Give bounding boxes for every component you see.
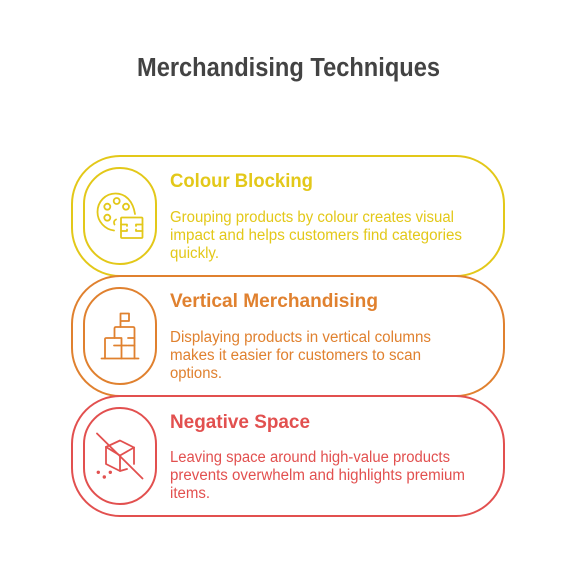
inner pill: colour blocking — [84, 168, 156, 264]
outer pill: negative space — [72, 396, 504, 516]
heading: vertical merchandising: Vertical Merchandising — [170, 290, 378, 312]
heading: negative space: Negative Space — [170, 411, 310, 433]
panel: colour blocking — [72, 156, 504, 276]
text: colour blocking description — [170, 209, 462, 262]
text: vertical merchandising description: options. — [170, 365, 222, 382]
title: Merchandising Techniques — [137, 54, 440, 82]
text: negative space description: items. — [170, 485, 210, 502]
text: vertical merchandising description: makes it easier for customers to scan — [170, 347, 421, 364]
icon: palette and swatches — [98, 194, 142, 238]
panel: vertical merchandising — [72, 276, 504, 396]
inner pill: vertical merchandising — [84, 288, 156, 384]
heading: colour blocking: Colour Blocking — [170, 170, 313, 192]
text: colour blocking description: Grouping products by colour creates visual — [170, 209, 454, 226]
outer pill: colour blocking — [72, 156, 504, 276]
outer pill: vertical merchandising — [72, 276, 504, 396]
text: colour blocking description: quickly. — [170, 245, 219, 262]
text: vertical merchandising description: Displaying products in vertical columns — [170, 329, 431, 346]
text: colour blocking description: impact and helps customers find categories — [170, 227, 462, 244]
text: vertical merchandising description — [170, 329, 431, 382]
icon: crossed-out box — [97, 434, 142, 478]
text: negative space description — [170, 449, 465, 502]
inner pill: negative space — [84, 408, 156, 504]
panel: negative space — [72, 396, 504, 516]
icon: flag on stacked columns — [102, 314, 138, 358]
text: negative space description: Leaving space around high-value products — [170, 449, 450, 466]
text: negative space description: prevents overwhelm and highlights premium — [170, 467, 465, 484]
